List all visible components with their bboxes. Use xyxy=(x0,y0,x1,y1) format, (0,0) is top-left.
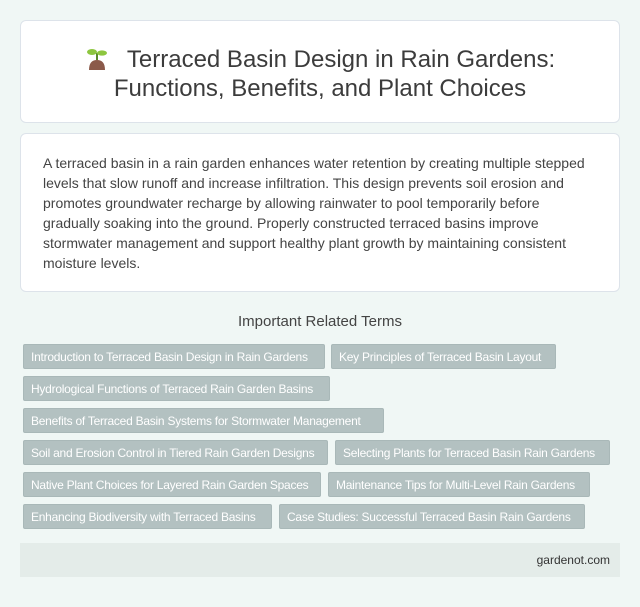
title card: Terraced Basin Design in Rain Gardens: xyxy=(127,46,555,73)
tags: Soil and Erosion Control in Tiered Rain Garden Designs xyxy=(31,446,314,460)
footer xyxy=(20,543,620,577)
title card: Functions, Benefits, and Plant Choices xyxy=(114,75,526,102)
tags: Key Principles of Terraced Basin Layout xyxy=(339,350,541,364)
tags: Benefits of Terraced Basin Systems for Stormwater Management xyxy=(31,414,361,428)
tags: Hydrological Functions of Terraced Rain Garden Basins xyxy=(31,382,313,396)
footer: gardenot.com xyxy=(537,553,610,567)
description panel: moisture levels. xyxy=(43,255,140,271)
description panel: A terraced basin in a rain garden enhances water retention by creating multiple stepped xyxy=(43,155,585,171)
tags: Selecting Plants for Terraced Basin Rain Gardens xyxy=(343,446,595,460)
description panel xyxy=(20,133,620,292)
tags: Case Studies: Successful Terraced Basin Rain Gardens xyxy=(287,510,571,524)
title card xyxy=(20,20,620,123)
description panel: levels that slow runoff and increase infiltration. This design prevents soil erosion and xyxy=(43,175,564,191)
description panel: stormwater management and support healthy plant growth by maintaining consistent xyxy=(43,235,566,251)
description panel: gradually soaking into the ground. Properly constructed terraced basins improve xyxy=(43,215,539,231)
tags: Introduction to Terraced Basin Design in Rain Gardens xyxy=(31,350,308,364)
tags: Maintenance Tips for Multi-Level Rain Gardens xyxy=(336,478,575,492)
description panel: promotes groundwater recharge by allowing rainwater to pool temporarily before xyxy=(43,195,539,211)
tags: Native Plant Choices for Layered Rain Garden Spaces xyxy=(31,478,308,492)
tags: Enhancing Biodiversity with Terraced Basins xyxy=(31,510,255,524)
icon: seedling xyxy=(87,49,107,70)
heading: related terms: Important Related Terms xyxy=(238,313,402,330)
